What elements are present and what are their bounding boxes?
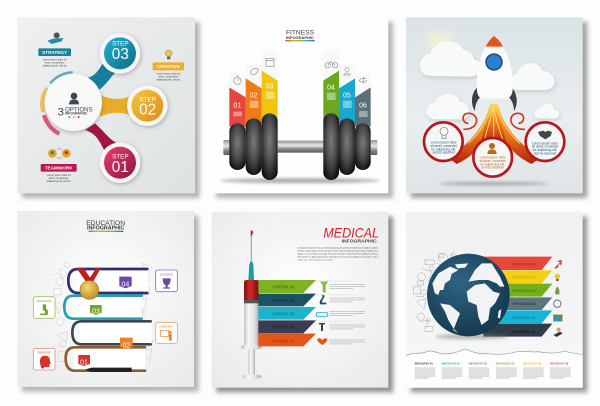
cloud shadows xyxy=(421,43,560,121)
box: learning: LEARNING xyxy=(160,325,173,329)
data bar 04: INFODATA 04 xyxy=(512,289,537,293)
step 03 badge: 03 xyxy=(112,46,129,63)
box: progress: PROGRESS xyxy=(36,299,52,303)
clouds xyxy=(420,41,559,119)
intro text: aliquip ex ea commodo consequat. Duis aute irure dolor in reprehenderit in voluptate velit esse xyxy=(297,252,379,255)
option 05 bar xyxy=(258,280,316,293)
book 04 xyxy=(68,269,148,293)
icon: bulb xyxy=(440,127,448,139)
intro text xyxy=(297,246,379,262)
ribbon 02 xyxy=(246,78,262,123)
book 03 xyxy=(64,296,142,319)
title xyxy=(86,220,125,232)
box: success xyxy=(156,270,177,292)
column 06 xyxy=(550,362,571,378)
creative label: CREATIVE xyxy=(157,64,180,69)
doodle sketches xyxy=(413,252,458,331)
data bar 01: INFODATA 01 xyxy=(512,330,536,334)
data bar 05 xyxy=(487,270,552,283)
box: learning xyxy=(156,322,177,343)
circle center: person: sed do eiusmod xyxy=(482,166,504,170)
continents xyxy=(432,263,504,333)
center label: INFOGRAPHIC xyxy=(65,112,88,116)
strategy label xyxy=(38,32,71,68)
circle center: person: sit amet, consectet xyxy=(480,159,506,163)
right weight plates xyxy=(323,113,371,180)
circle left: light bulb: Lorem ipsum dolor xyxy=(431,141,457,145)
data bar 02 xyxy=(490,310,552,323)
column 04: INFODATA 04 xyxy=(496,362,515,366)
title xyxy=(285,29,315,41)
center label: OPTIONS xyxy=(65,107,93,114)
column 02: INFODATA 02 xyxy=(442,362,460,366)
icon: handshake xyxy=(538,131,552,139)
teamwork label: TEAMWORK xyxy=(45,166,73,171)
icon: trophy xyxy=(163,278,171,289)
fitness icons xyxy=(234,58,367,84)
step 02 badge xyxy=(127,85,169,127)
circle left: light bulb: tur adipiscing elit, xyxy=(431,147,456,151)
column 04 xyxy=(496,362,517,378)
option 04 bar xyxy=(258,294,316,306)
ribbon text lines xyxy=(233,92,368,117)
creative label: Lorem ipsum dolor sit xyxy=(156,73,181,76)
creative label: adipiscing elit, sed do xyxy=(156,79,181,82)
data bar 06: INFODATA 06 xyxy=(512,262,536,266)
option 01 bar: OPTION 01 xyxy=(272,338,295,343)
center label: 3 xyxy=(58,106,64,118)
teamwork label xyxy=(41,149,77,183)
ribbon 02: 02 xyxy=(250,92,258,99)
circle center: person xyxy=(473,138,512,177)
tag 02: 02 xyxy=(122,342,130,349)
icon: person xyxy=(69,93,79,104)
ribbon 01: 01 xyxy=(233,102,241,109)
rocket xyxy=(472,36,517,111)
connector: step 01 xyxy=(85,123,116,152)
panel: fitness dumbbell xyxy=(212,17,393,198)
circle left: light bulb: sed do eiusmod xyxy=(433,151,455,155)
step 01 badge xyxy=(100,142,141,184)
icon: head xyxy=(40,356,51,368)
tag 01 xyxy=(78,355,90,367)
tag 04: 04 xyxy=(121,281,129,288)
tag 03 xyxy=(90,305,102,315)
ribbon 04: 04 xyxy=(327,84,335,91)
dumbbell bar xyxy=(223,140,377,155)
column 01 xyxy=(415,362,435,378)
panel: three options diagram xyxy=(17,17,200,198)
column 05: INFODATA 05 xyxy=(523,362,542,366)
globe xyxy=(427,254,510,339)
rocket flames xyxy=(447,104,542,164)
circle center: person: tur adipiscing elit, xyxy=(480,162,505,166)
option 05 bar: OPTION 05 xyxy=(272,284,295,289)
step 03 badge xyxy=(100,33,141,75)
data columns xyxy=(415,362,571,378)
step 01 badge: 01 xyxy=(112,159,129,176)
option icons xyxy=(316,282,328,345)
option 03 bar: OPTION 03 xyxy=(272,311,295,316)
column 01: INFODATA 01 xyxy=(415,362,433,366)
data bar 03: INFODATA 03 xyxy=(512,302,536,306)
ribbon 05 xyxy=(339,78,355,123)
data bar 05: INFODATA 05 xyxy=(512,276,536,280)
box: success: SUCCESS xyxy=(160,272,173,276)
rocket nose xyxy=(486,36,503,47)
title: FITNESS xyxy=(286,29,315,36)
icon: teacher at board xyxy=(161,330,172,341)
tear edge xyxy=(406,349,583,356)
strategy label: STRATEGY xyxy=(42,50,68,55)
option 04 bar: OPTION 04 xyxy=(272,298,295,303)
panel: rocket launch xyxy=(406,17,587,198)
connector: step 03 xyxy=(82,60,117,93)
icon: two heads xyxy=(48,149,71,158)
teamwork label: adipiscing elit, sed do xyxy=(47,180,71,183)
ribbon 06 xyxy=(355,87,371,127)
box: progress xyxy=(33,297,55,318)
teamwork label: amet, consectetur xyxy=(49,177,69,180)
icon: person xyxy=(487,143,497,154)
circle center: person: Lorem ipsum dolor xyxy=(480,156,506,160)
torn paper xyxy=(406,349,583,388)
data bar 03 xyxy=(490,297,552,310)
data bar 02: INFODATA 02 xyxy=(512,316,536,320)
strategy label: adipiscing elit, sed do xyxy=(43,65,67,68)
ribbon 05: 05 xyxy=(343,92,351,99)
option 01 bar xyxy=(258,334,316,346)
intro text: cillum dolore eu fugiat nulla pariatur. Excepteur sint occaecat cupidatat non proident, sunt in xyxy=(297,255,379,258)
creative label xyxy=(153,50,184,82)
center circle xyxy=(45,74,103,133)
book 02 xyxy=(72,321,152,344)
option 02 bar xyxy=(258,320,316,333)
tag 01: 01 xyxy=(80,360,88,367)
ribbon 03: 03 xyxy=(266,84,274,91)
column 03 xyxy=(469,362,489,378)
icon: microscope xyxy=(40,304,48,315)
doodle sketches xyxy=(53,262,153,368)
ribbon 03 xyxy=(262,71,278,120)
step 02 badge: 02 xyxy=(139,102,156,119)
title: INFOGRAPHIC xyxy=(87,226,124,232)
data bar 01 xyxy=(483,324,552,337)
column 02 xyxy=(442,362,462,378)
ground shadow xyxy=(220,178,380,183)
medal xyxy=(77,268,101,299)
option text lines xyxy=(329,284,365,344)
title: INFOGRAPHIC xyxy=(342,238,377,244)
panel: medical syringe xyxy=(212,212,393,392)
ribbon 01 xyxy=(229,87,246,127)
circle right: handshake: sit amet, consectet xyxy=(532,145,558,149)
book 01 xyxy=(66,347,145,371)
tag 02 xyxy=(120,338,133,349)
teamwork label: Lorem ipsum dolor sit xyxy=(47,174,71,177)
bar icons xyxy=(553,260,563,337)
circle right: handshake: sed do eiusmod xyxy=(534,151,556,155)
circle right: handshake: Lorem ipsum dolor xyxy=(532,141,558,145)
creative label: amet, consectetur xyxy=(158,76,178,79)
title: INFOGRAPHIC xyxy=(286,35,314,40)
step 01 badge: STEP xyxy=(112,154,129,161)
center label xyxy=(58,106,93,118)
rocket window xyxy=(486,54,502,70)
circle right: handshake xyxy=(526,122,564,161)
circle right: handshake: tur adipiscing elit, xyxy=(533,148,557,152)
panel: globe data xyxy=(406,212,587,392)
pen xyxy=(85,368,132,372)
column 05 xyxy=(523,362,544,378)
panel: education books xyxy=(17,211,199,392)
circle left: light bulb xyxy=(424,122,463,161)
option 03 bar xyxy=(258,307,316,320)
ground shadow xyxy=(438,182,548,185)
connector: step 02 xyxy=(100,94,135,117)
swirls xyxy=(463,113,525,129)
center arc segments xyxy=(42,73,73,134)
intro text: Lorem ipsum dolor sit amet, consectetur adipiscing elit, sed do eiusmod tempor incididunt ut labore xyxy=(297,246,379,249)
icon: light bulb xyxy=(165,50,172,59)
circle left: light bulb: sit amet, consectet xyxy=(431,144,457,148)
ribbon 04 xyxy=(323,71,339,120)
white ribbon backs xyxy=(229,51,371,127)
intro text: culpa qui officia deserunt mollit. xyxy=(297,259,334,262)
box: creative: CREATIVE xyxy=(37,351,51,355)
option 02 bar: OPTION 02 xyxy=(272,325,295,330)
left weight plates xyxy=(229,113,278,180)
title: EDUCATION xyxy=(86,220,125,227)
step 03 badge: STEP xyxy=(112,41,129,48)
strategy label: amet, consectetur xyxy=(45,62,65,65)
white bar tails xyxy=(313,280,365,322)
data bar 06 xyxy=(480,257,552,270)
data bar 04 xyxy=(490,284,552,297)
tag 04 xyxy=(119,277,132,288)
tag 03: 03 xyxy=(92,308,100,315)
ribbon 06: 06 xyxy=(359,102,367,109)
intro text: et dolore magna aliqua. Ut enim ad minim veniam, quis nostrud exercitation ullamco laboris nisi ut xyxy=(297,249,379,252)
icon: hand with gear xyxy=(47,32,63,44)
step 02 badge: STEP xyxy=(139,96,156,103)
column 06: INFODATA 06 xyxy=(550,362,569,366)
column 03: INFODATA 03 xyxy=(469,362,487,366)
syringe xyxy=(241,230,262,379)
strategy label: Lorem ipsum dolor sit xyxy=(43,59,67,62)
title: MEDICAL xyxy=(323,226,379,241)
box: creative xyxy=(33,348,55,370)
